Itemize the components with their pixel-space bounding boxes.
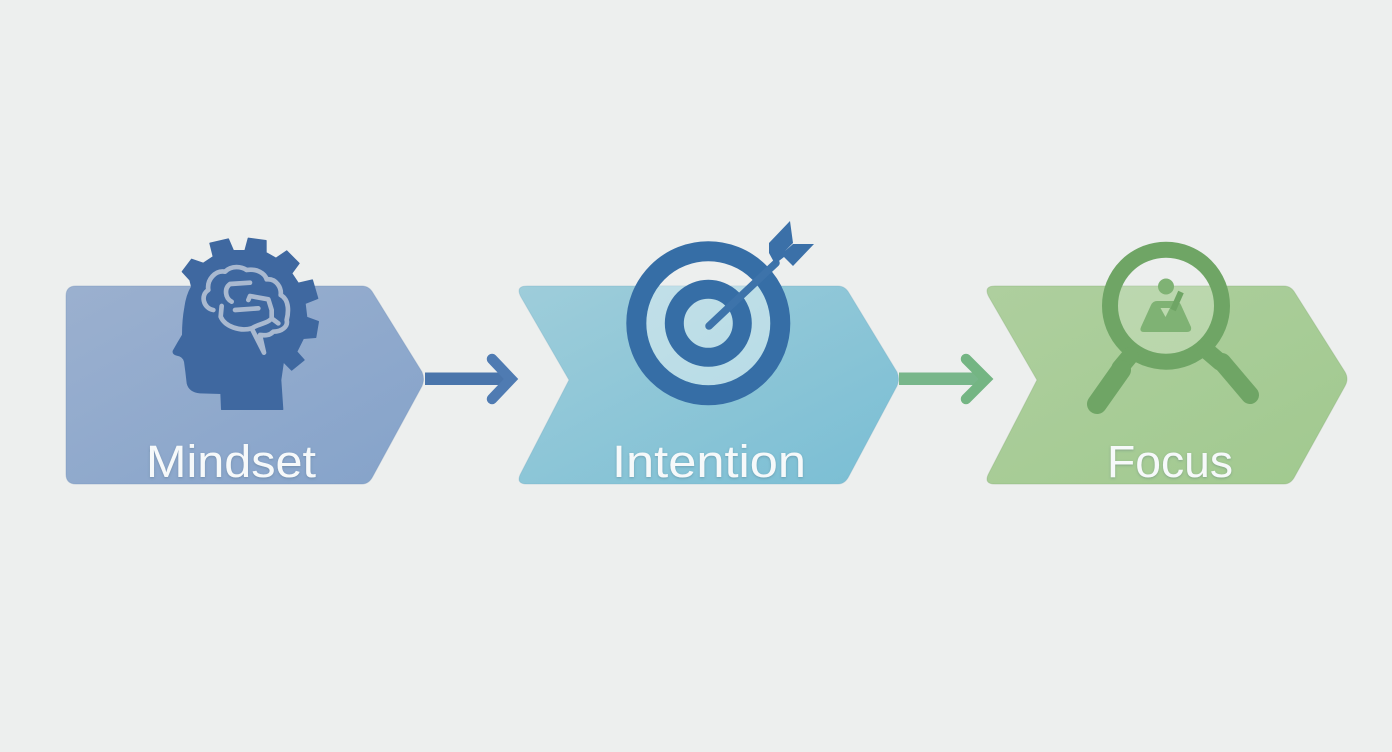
dart fletching: [769, 221, 814, 266]
label: Focus: Focus: [1107, 436, 1233, 487]
dart shaft: [709, 263, 776, 326]
icon: magnifying glass with figure: [1097, 250, 1250, 404]
left handle: [1097, 356, 1130, 404]
panel: Intention: [519, 221, 898, 487]
right handle: [1206, 350, 1250, 395]
figure needle: [1173, 292, 1181, 310]
panel shape: Focus chevron: [987, 286, 1347, 484]
lens tint: [1118, 286, 1214, 354]
target light rings: [646, 286, 770, 386]
label: Mindset: Mindset: [146, 436, 317, 487]
icon: head with gear and brain: [173, 238, 318, 409]
panel: Mindset: [66, 238, 424, 487]
brain outline: [204, 267, 288, 353]
head and gear silhouette: [173, 238, 318, 409]
infographic: three-step process flow: [66, 221, 1348, 484]
lens ring: [1110, 250, 1222, 362]
target dark rings: [636, 251, 780, 395]
panel shape: Mindset arrow block: [66, 286, 424, 484]
figure head: [1158, 278, 1174, 294]
panel: Focus: [987, 250, 1347, 487]
icon: target with arrow: [636, 221, 814, 395]
arrow: Intention to Focus: [899, 359, 986, 399]
arrow: Mindset to Intention: [425, 359, 511, 399]
figure body: [1140, 301, 1191, 332]
figure marker: [1160, 308, 1170, 317]
panel shape: Intention chevron: [519, 286, 898, 484]
label: Intention: Intention: [612, 436, 806, 487]
